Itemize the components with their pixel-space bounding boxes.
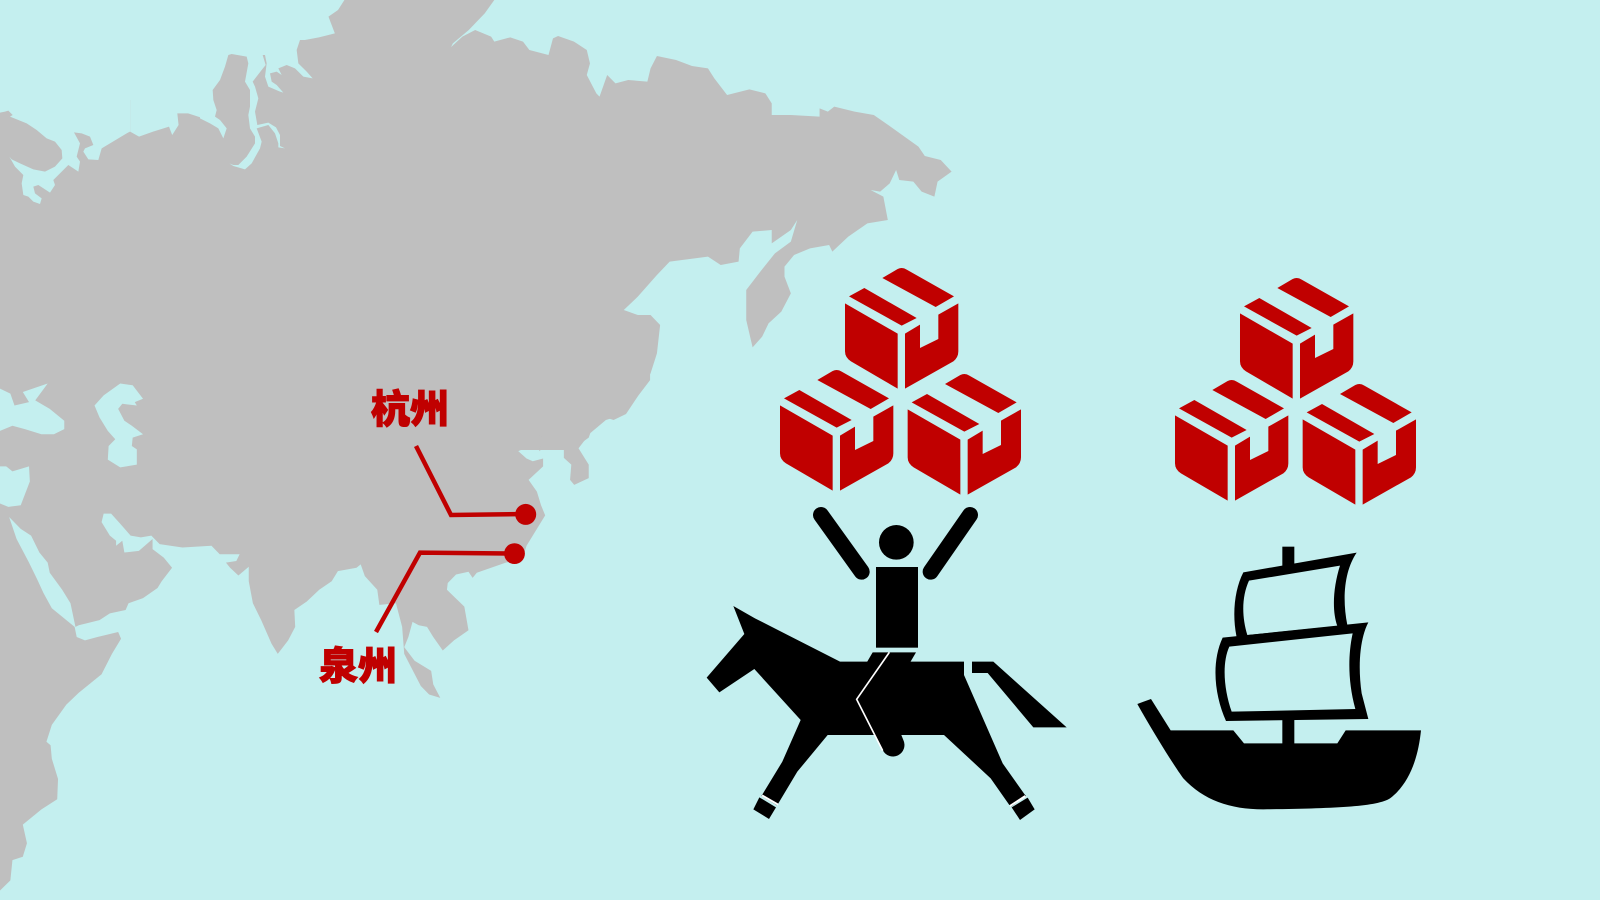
callout: Quanzhou leader line and dot [376, 543, 525, 632]
icon: stacked parcels above ship [1175, 278, 1416, 505]
icon: horse and rider [707, 515, 1067, 820]
label: Quanzhou: 泉州 [319, 646, 397, 689]
callout: Hangzhou leader line and dot [416, 446, 536, 525]
icon: stacked parcels above rider [780, 268, 1021, 495]
map: Asia landmass [0, 0, 952, 891]
label: Hangzhou: 杭州 [371, 389, 449, 432]
icon: sailing ship [1137, 547, 1421, 809]
